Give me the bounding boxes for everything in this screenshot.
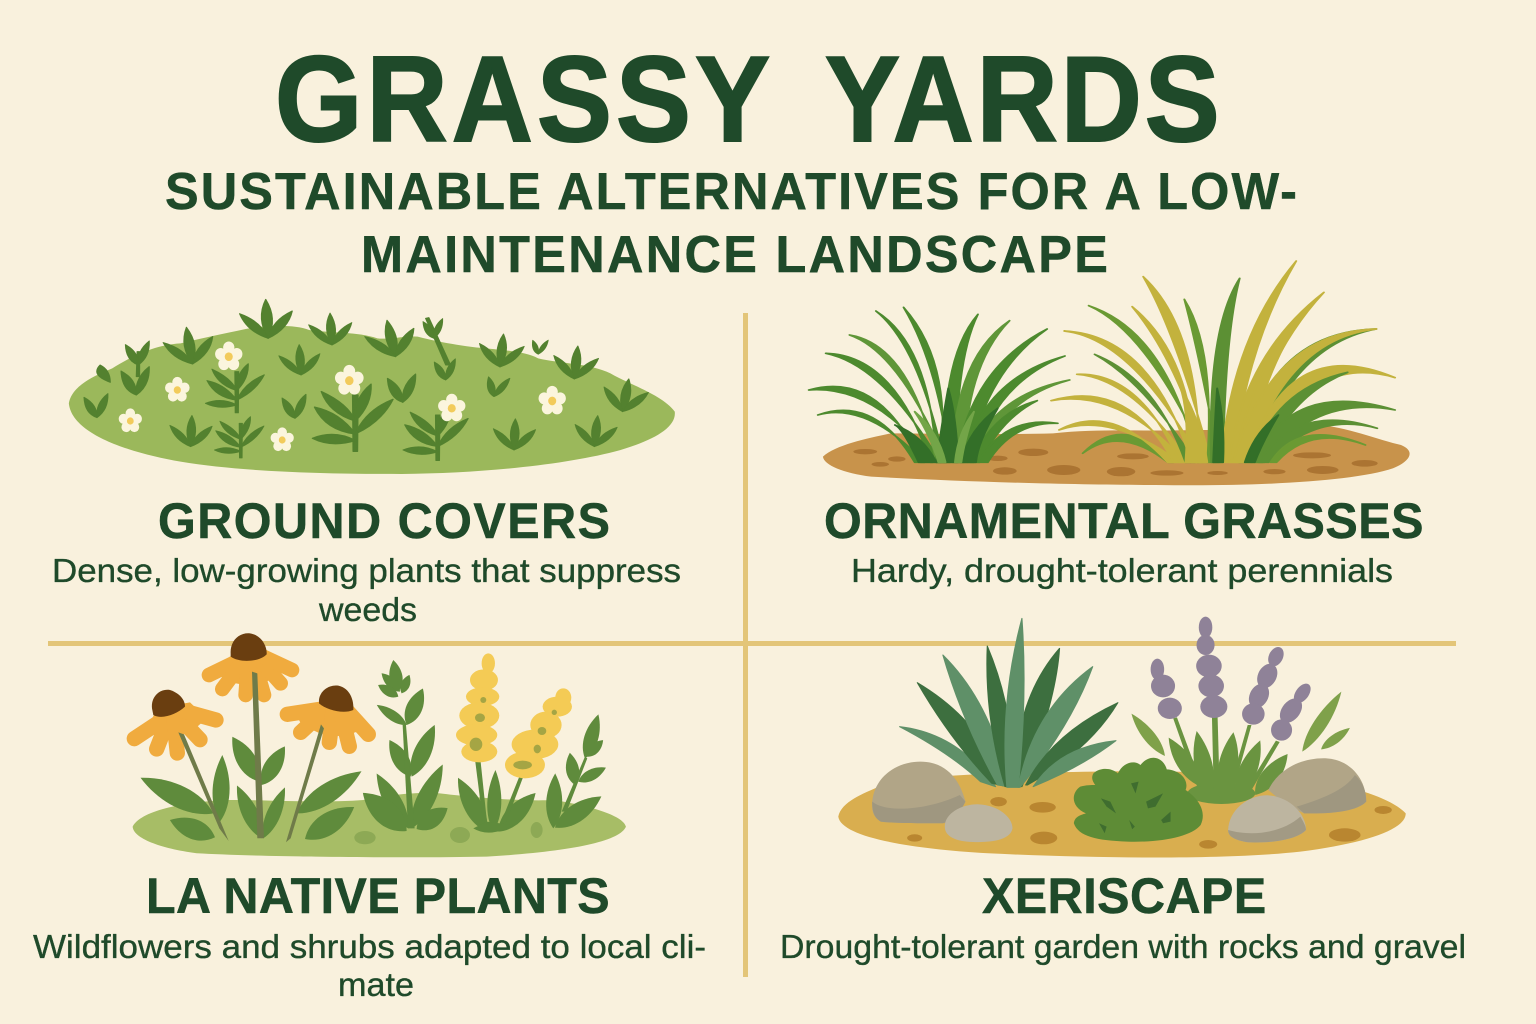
title: GRASSY (275, 31, 770, 167)
orange petals (134, 654, 368, 753)
soil pebbles (907, 797, 1392, 849)
agave plant (900, 618, 1118, 787)
green leaves (136, 659, 608, 848)
flower stems (178, 672, 324, 842)
lavender plant (1126, 617, 1353, 804)
heading: ornamental grasses: ORNAMENTAL GRASSES (824, 493, 1423, 549)
subtitle (165, 162, 1297, 283)
seed heads (152, 633, 353, 717)
right grass clump (1051, 261, 1395, 462)
panel: ornamental grasses illustration (809, 261, 1410, 485)
ground cover mound (69, 326, 675, 474)
left grass clump (809, 307, 1070, 462)
subtitle: SUSTAINABLE ALTERNATIVES FOR A LOW- (165, 162, 1297, 220)
text: LA native plants description (33, 928, 706, 1003)
soil pebbles (853, 449, 1378, 476)
text: LA native plants description: mate (338, 966, 414, 1003)
panel: LA native plants illustration (133, 633, 626, 857)
text: ground covers description (52, 552, 681, 628)
heading: LA native plants: LA NATIVE PLANTS (146, 868, 610, 924)
panel: ground covers illustration (69, 299, 675, 474)
title (275, 31, 1220, 167)
panel: xeriscape illustration (838, 617, 1406, 857)
sandy soil (838, 771, 1406, 857)
heading: xeriscape: XERISCAPE (982, 868, 1266, 924)
shrub (1074, 758, 1203, 842)
text: ornamental grasses description: Hardy, drought-tolerant perennials (851, 552, 1393, 589)
text: ground covers description: weeds (318, 591, 417, 628)
text: LA native plants description: Wildflowers and shrubs adapted to local cli- (33, 928, 706, 965)
soil mound (823, 424, 1410, 485)
yellow flower spikes (456, 653, 572, 778)
text: xeriscape description: Drought-tolerant garden with rocks and gravel (780, 928, 1466, 965)
white flowers (119, 341, 566, 451)
text: ground covers description: Dense, low-growing plants that suppress (52, 552, 681, 589)
heading: ground covers: GROUND COVERS (158, 493, 610, 549)
title: YARDS (825, 31, 1220, 167)
ground specks (354, 822, 543, 844)
divider lines (48, 313, 1456, 977)
leaf clumps (84, 299, 651, 460)
flower spots (470, 697, 557, 769)
subtitle: MAINTENANCE LANDSCAPE (361, 225, 1108, 283)
rocks (872, 758, 1366, 842)
meadow ground (133, 793, 626, 857)
